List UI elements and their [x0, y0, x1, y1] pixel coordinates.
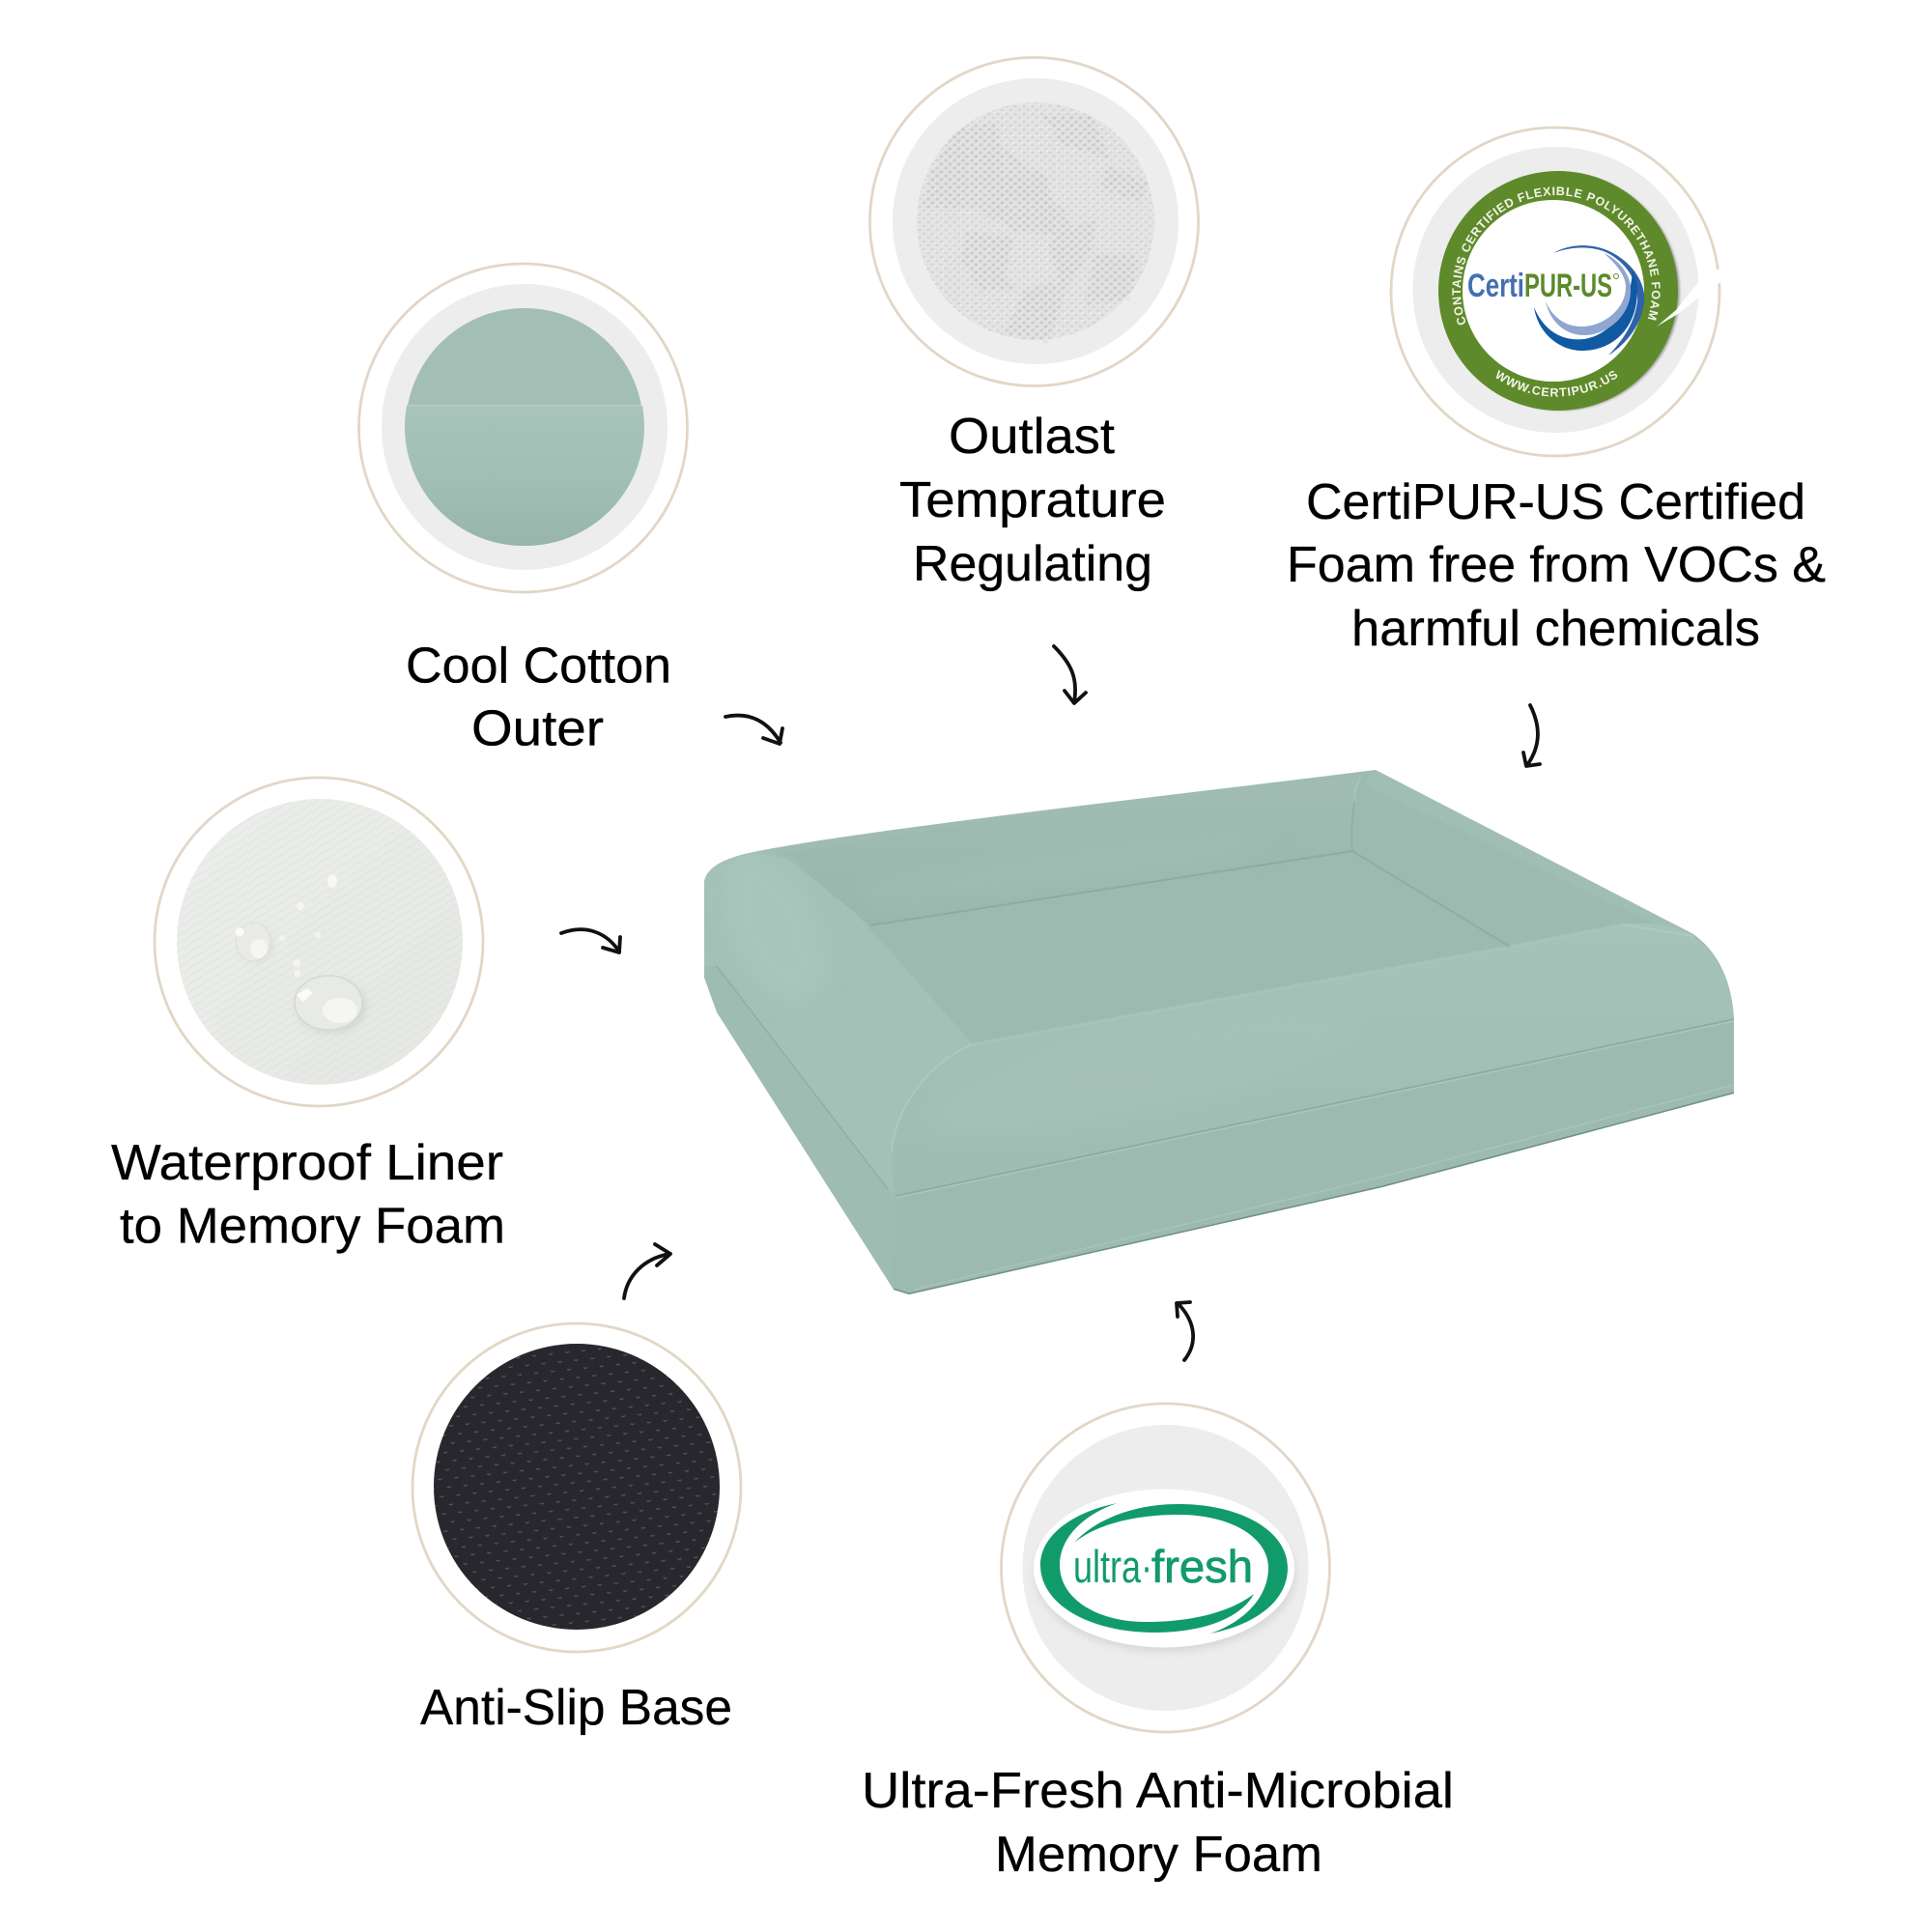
- feature: outlast temperature regulating: [869, 58, 1198, 592]
- feature: outlast temperature regulating: Outlast: [949, 409, 1116, 465]
- feature: ultra-fresh anti-microbial memory foam: Ultra-Fresh Anti-Microbial: [862, 1763, 1454, 1819]
- feature: outlast temperature regulating: Temprature: [899, 472, 1166, 528]
- arrow: cool cotton to bed: [725, 716, 782, 744]
- logo swirl: [1534, 245, 1644, 355]
- feature: ultra-fresh anti-microbial memory foam: [862, 1404, 1454, 1883]
- feature: CertiPUR-US certified foam: CertiPUR-US Certified: [1306, 474, 1805, 530]
- swatch: black dotted rubber base: [434, 1344, 720, 1630]
- feature: anti-slip base: [412, 1323, 741, 1736]
- logo: CertiPUR-US seal: CONTAINS CERTIFIED FLEXIBLE POLYURETHANE FOAM: [1452, 186, 1661, 325]
- feature: ultra-fresh anti-microbial memory foam: Memory Foam: [995, 1827, 1322, 1883]
- feature: CertiPUR-US certified foam: Foam free from VOCs &: [1287, 537, 1826, 593]
- feature: anti-slip base: Anti-Slip Base: [420, 1680, 732, 1736]
- logo: CertiPUR-US seal: WWW.CERTIPUR.US: [1495, 370, 1617, 397]
- logo: CertiPUR-US seal: [1438, 171, 1720, 412]
- feature: waterproof liner: [111, 778, 505, 1254]
- arrow: ultra-fresh to bed: [1177, 1302, 1193, 1360]
- feature: cool cotton outer: Outer: [471, 701, 604, 757]
- feature: waterproof liner: to Memory Foam: [120, 1198, 505, 1254]
- feature: cool cotton outer: [359, 264, 688, 757]
- logo: CertiPUR-US seal: Certi: [1467, 268, 1524, 304]
- arrow: certipur to bed: [1523, 705, 1540, 766]
- feature: cool cotton outer: Cool Cotton: [406, 638, 671, 694]
- logo: CertiPUR-US seal: PUR-US: [1524, 268, 1612, 304]
- swatch: white mesh fabric: [917, 102, 1154, 343]
- swatch: waterproof fabric with droplets: [177, 799, 463, 1085]
- feature: CertiPUR-US certified foam: [1287, 126, 1826, 657]
- feature: CertiPUR-US certified foam: harmful chemicals: [1351, 601, 1760, 657]
- arrow: outlast to bed: [1054, 646, 1086, 703]
- logo: ultra-fresh oval: ultra·: [1073, 1541, 1152, 1592]
- arrow: waterproof to bed: [561, 929, 620, 952]
- feature: outlast temperature regulating: Regulating: [913, 536, 1152, 592]
- swatch: mint cotton fabric: [405, 308, 644, 546]
- product: mint bolster dog bed: [696, 763, 1748, 1304]
- logo: ultra-fresh oval: fresh: [1151, 1541, 1253, 1592]
- feature: waterproof liner: Waterproof Liner: [111, 1135, 503, 1191]
- logo: ultra-fresh oval: [1034, 1490, 1295, 1652]
- arrow: anti-slip to bed: [624, 1244, 670, 1298]
